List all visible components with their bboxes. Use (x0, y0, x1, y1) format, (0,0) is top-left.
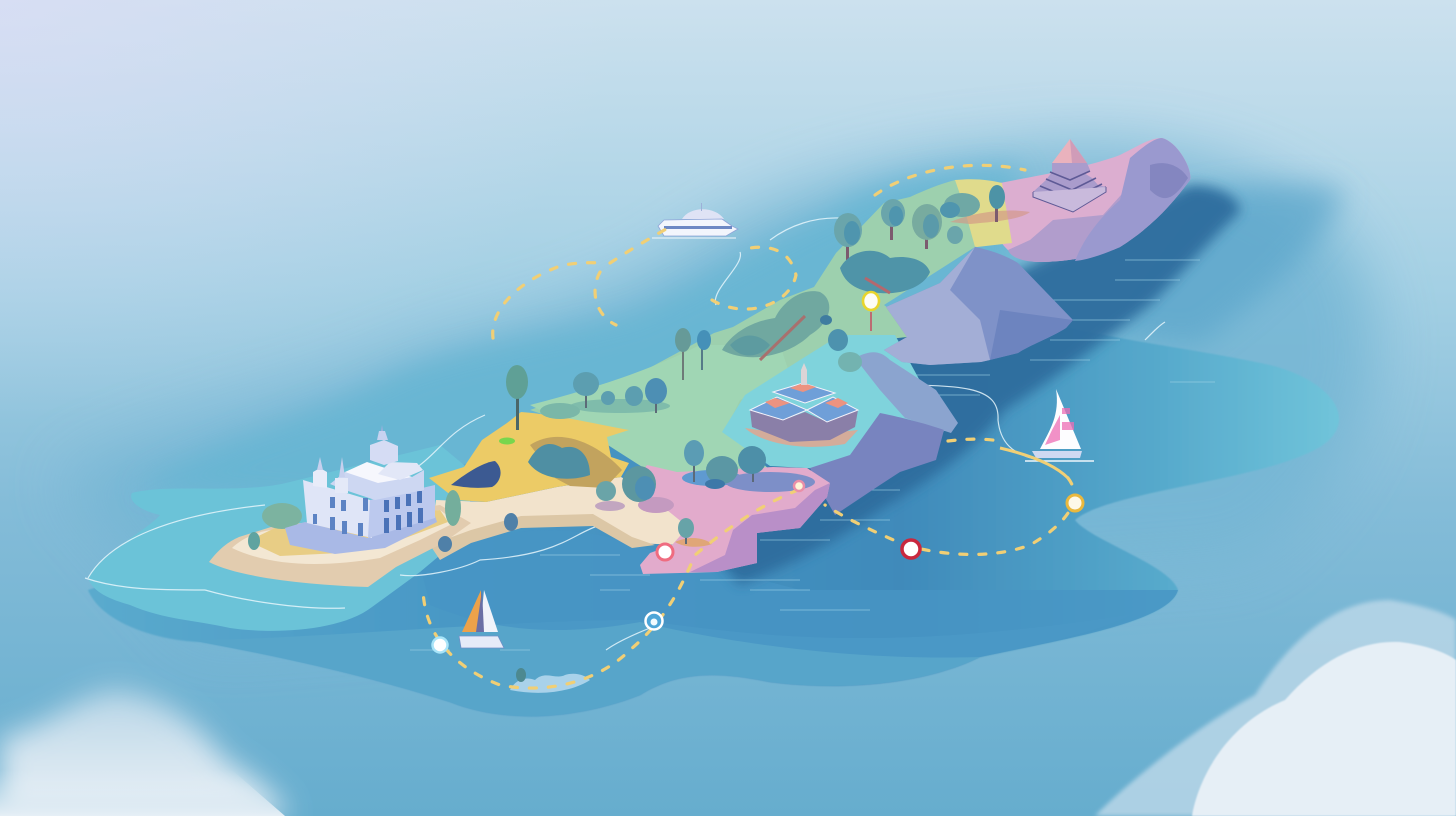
land: small green pond (499, 438, 515, 444)
land: turquoise midlands (722, 335, 948, 470)
trees: north ridge (834, 185, 1030, 260)
land: headland cliff shade (1150, 163, 1188, 198)
left lagoon (88, 445, 470, 631)
palace: roof terrace (378, 462, 423, 480)
trees (248, 185, 1030, 552)
pagoda: spire (1052, 139, 1087, 163)
land: sand beach (430, 477, 700, 555)
trees: mid ridge cluster (722, 251, 930, 372)
palace: dome (377, 431, 388, 440)
water ripple lines (410, 260, 1215, 650)
pagoda: base outline (1033, 187, 1106, 212)
route highlight under boat (1000, 448, 1068, 478)
map marker: white (432, 638, 448, 652)
reef (510, 668, 590, 693)
white sea current lines (85, 218, 1165, 650)
map marker: yellow pin (863, 292, 879, 331)
cloud: bottom right back (1095, 600, 1456, 816)
upper sea haze (60, 145, 1375, 640)
palace: roof (345, 462, 412, 483)
map marker: small pink (794, 481, 804, 491)
pavilion: walls (750, 410, 858, 442)
land: headland east cliff (1075, 138, 1190, 261)
land: lower cliff (810, 413, 944, 515)
map marker: blue (646, 612, 662, 630)
land: headland lower cliff (1008, 185, 1150, 262)
palace: left tower (313, 468, 327, 488)
trees: left islet (248, 490, 518, 552)
cloud: bottom left (0, 690, 290, 816)
land: left islet inner sand (232, 510, 456, 564)
lower ring tint (190, 615, 1130, 716)
central pavilion (745, 363, 858, 447)
land: central meadow (530, 345, 790, 476)
trees: south cluster (595, 440, 815, 547)
land: yellow field (429, 412, 629, 502)
land: tan hollow (530, 437, 622, 488)
land: pink peninsula (628, 465, 830, 574)
palace: left wing facade (303, 480, 372, 538)
pagoda: spire shade (1070, 139, 1087, 163)
central bay deep water (420, 530, 1178, 658)
land: left islet outer sand (209, 505, 471, 587)
land: mountain dark face (990, 310, 1073, 360)
land: left islet lawn (248, 510, 448, 556)
land: peninsula shade (690, 483, 830, 572)
land: mountain light face (884, 247, 990, 365)
pavilion: orange accents (765, 383, 848, 408)
pavilion: left roof (750, 397, 807, 420)
dashed voyage route (423, 165, 1074, 688)
trees: tall trees (506, 328, 711, 430)
land: central mountain (884, 247, 1073, 365)
island (209, 138, 1190, 587)
main sea blob (88, 300, 1339, 716)
tiered pagoda (1033, 139, 1106, 212)
teal band along north coast (135, 165, 1020, 520)
map marker: red (902, 540, 920, 558)
palace: right windows (384, 491, 423, 533)
palace: dome drum (370, 440, 398, 465)
ferry (652, 203, 738, 238)
pagoda: body (1033, 163, 1106, 212)
map marker: gold (1067, 495, 1083, 511)
pavilion: base shadow (745, 428, 858, 447)
east sea haze (1090, 185, 1345, 345)
palace: upper floor (330, 470, 424, 500)
grand palace building (285, 425, 437, 554)
pavilion: tower (801, 363, 807, 385)
land: green ridge (530, 180, 975, 440)
land: pink headland (1000, 138, 1190, 262)
palace: right wing facade (368, 485, 435, 538)
cloud: bottom right front (1192, 642, 1456, 816)
land: yellow plateau (905, 179, 1012, 247)
palace: second spire (335, 478, 348, 493)
trees: meadow (540, 372, 670, 419)
pavilion: top roof (773, 383, 835, 403)
pagoda: tier stripes (1033, 171, 1106, 206)
sailboat: south, orange (459, 590, 504, 648)
deep water channel (700, 185, 1240, 585)
map marker: pink (657, 544, 673, 560)
land: tree cluster in hollow (528, 444, 590, 479)
sailboat: right, pink (1025, 389, 1094, 461)
pavilion: right roof (807, 397, 858, 422)
land: sand shore edge (430, 514, 655, 560)
land: navy pond (451, 461, 501, 488)
palace: left windows (313, 497, 368, 536)
land: cliff slab (855, 352, 958, 433)
palace: terrace (285, 516, 437, 554)
